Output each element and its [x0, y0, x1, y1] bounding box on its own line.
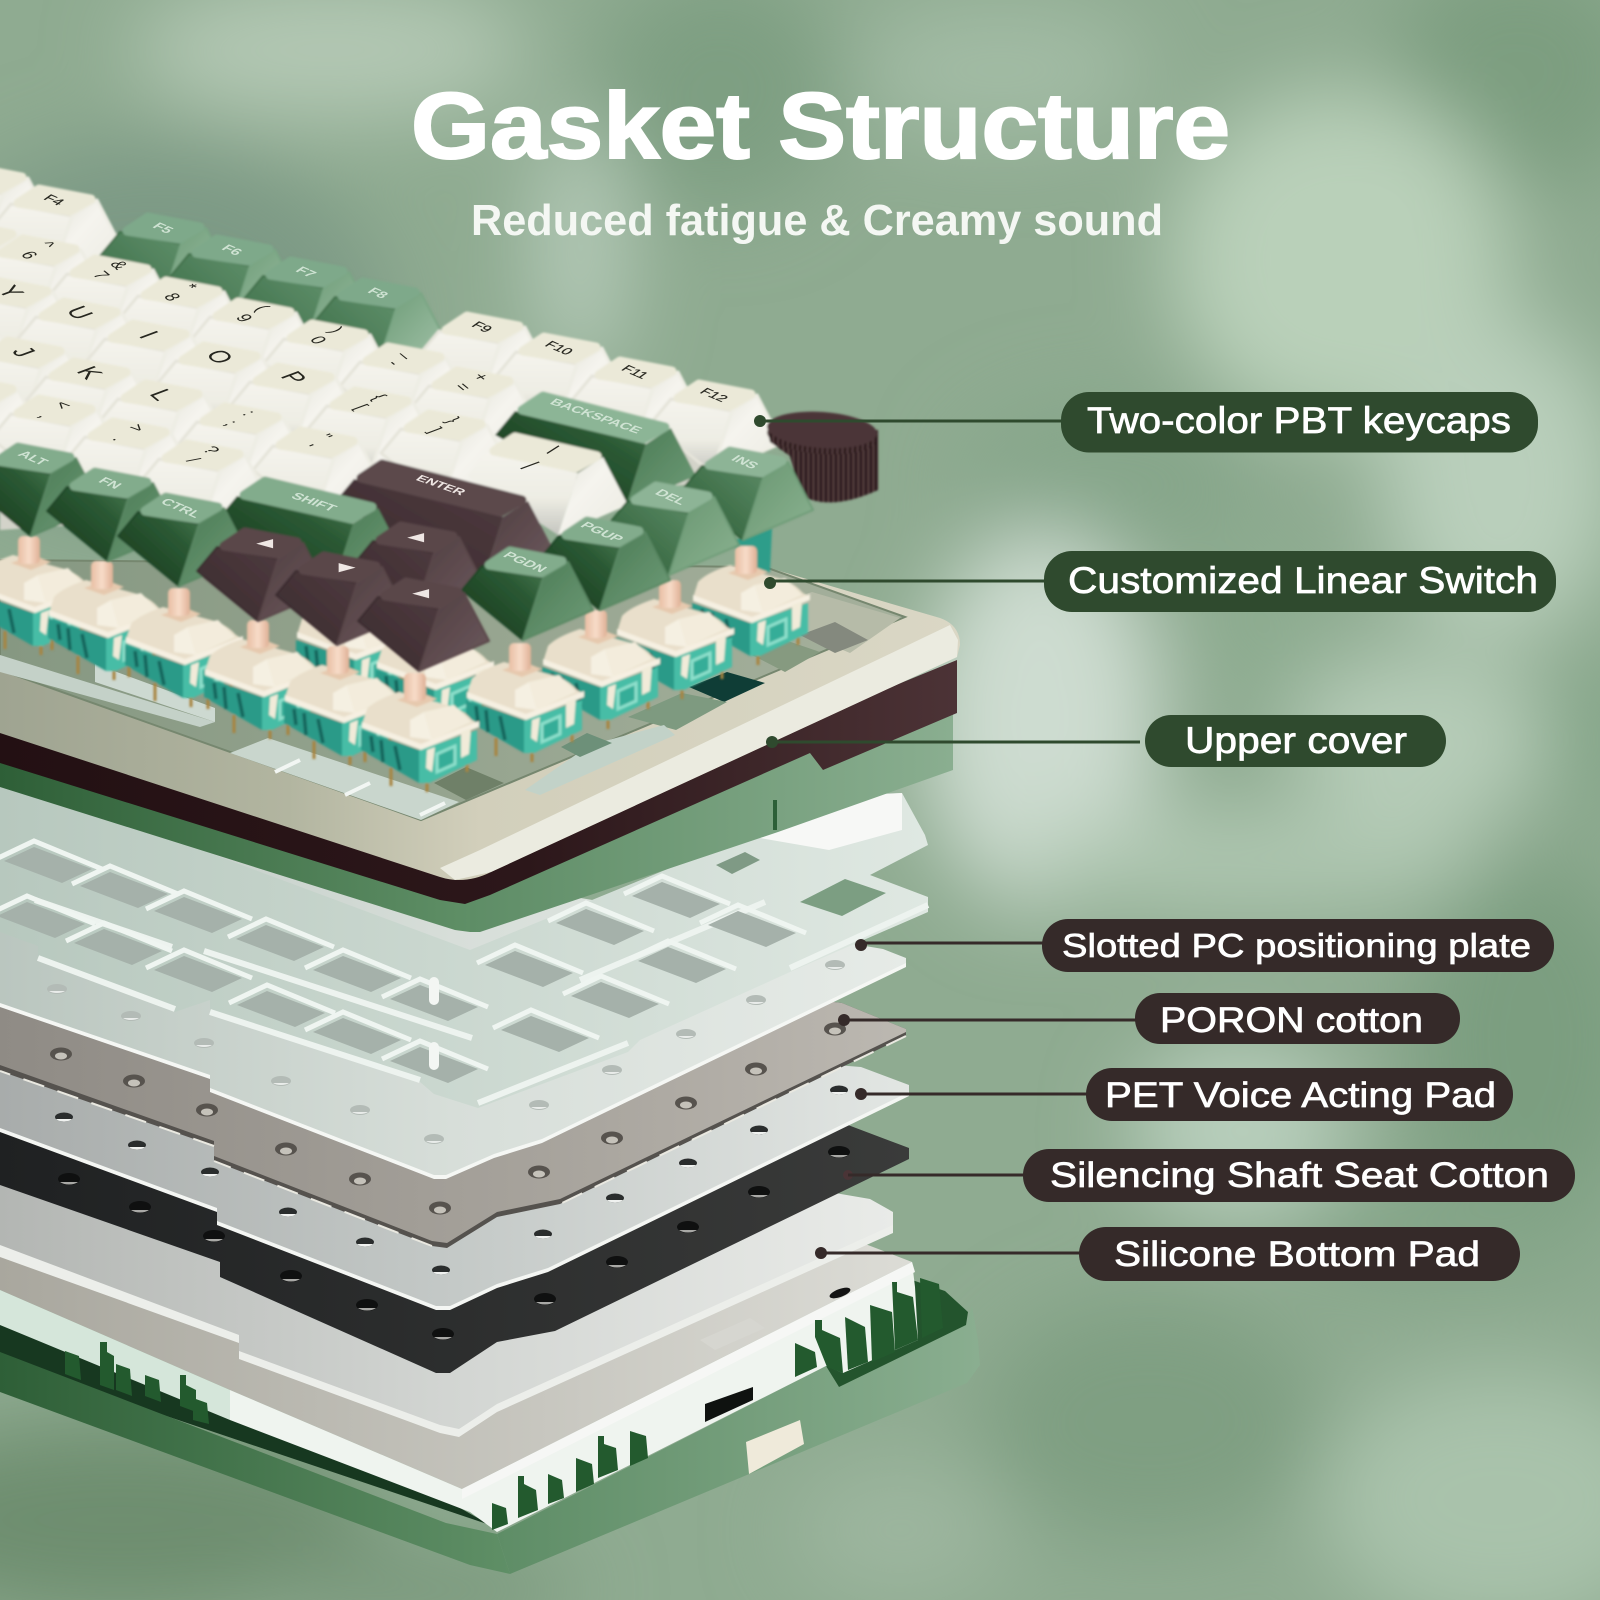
keycap legends: O	[199, 347, 239, 367]
keycap legends: 9	[231, 312, 257, 324]
keycap legends: P	[274, 368, 312, 388]
keycap legends: -	[382, 358, 406, 368]
keycap legends: "	[313, 432, 337, 442]
linear switches row	[0, 528, 810, 792]
callout: PORON cotton	[838, 993, 1460, 1044]
PCB slots and windows	[752, 640, 820, 672]
keycap legends: :	[238, 408, 260, 418]
keycap legends: F7	[292, 265, 320, 280]
keycap legends	[0, 193, 762, 599]
white block	[714, 793, 902, 850]
subtitle: Reduced fatigue & Creamy sound	[471, 196, 1163, 245]
backslash key	[467, 437, 628, 535]
port cut-out	[705, 1387, 753, 1422]
callout: Two-color PBT keycaps	[754, 392, 1538, 452]
keycap legends: |	[518, 459, 544, 471]
keycap legends: \	[539, 444, 566, 456]
PET voice acting pad	[0, 1000, 909, 1310]
callout: Upper cover	[766, 715, 1446, 767]
frosted white plate	[0, 800, 906, 1179]
shift key	[217, 481, 403, 586]
keycap legends: 0	[305, 334, 331, 346]
silencing shaft seat cotton: black plate	[0, 1050, 909, 1373]
right pocket	[795, 592, 900, 653]
keycap legends: F12	[697, 386, 731, 404]
keycap legends: ◀	[407, 531, 425, 543]
keycap legends: K	[70, 363, 108, 383]
keycap legends: (	[250, 303, 274, 313]
callout: Silicone Bottom Pad: Silicone Bottom Pad	[1114, 1235, 1480, 1274]
keycap legends: ◀	[412, 587, 430, 599]
keycap legends: )	[324, 325, 348, 335]
keycap legends: CTRL	[157, 496, 205, 520]
callout: Slotted PC positioning plate	[855, 919, 1554, 972]
callout: Upper cover: Upper cover	[1185, 720, 1407, 761]
keycap legends: F4	[40, 193, 68, 208]
keycap legends: _	[398, 346, 425, 360]
keycap legends: ?	[198, 444, 224, 456]
keycap legends: F9	[468, 320, 496, 334]
upper cover: keyboard frame	[0, 560, 960, 932]
callout: Slotted PC positioning plate: Slotted PC positioning plate	[1062, 927, 1531, 964]
keycap legends: >	[124, 422, 150, 434]
callout: PET Voice Acting Pad: PET Voice Acting Pad	[1105, 1076, 1496, 1115]
keycap legends: ;	[220, 418, 242, 428]
keycap legends: U	[59, 303, 99, 323]
callout: Silencing Shaft Seat Cotton: Silencing Shaft Seat Cotton	[1050, 1156, 1549, 1195]
keycap legends: +	[468, 371, 494, 383]
keycap legends: INS	[728, 453, 762, 471]
keycap legends: &	[105, 258, 133, 272]
keycap legends: ALT	[15, 449, 52, 468]
cream tab	[746, 1420, 804, 1474]
comb teeth	[65, 1278, 943, 1530]
keycap legends: BACKSPACE	[547, 397, 645, 435]
callout: PORON cotton: PORON cotton	[1160, 1001, 1423, 1040]
callout: PET Voice Acting Pad	[855, 1068, 1513, 1121]
knob	[766, 408, 878, 502]
keycap legends: PGDN	[500, 550, 550, 574]
keycap legends: }	[441, 415, 465, 425]
keycap legends: '	[296, 442, 318, 452]
keycap legends: L	[142, 386, 180, 404]
keycap legends: FN	[95, 475, 125, 491]
bottom case: green housing with teeth	[0, 1200, 980, 1574]
keycap legends: ENTER	[413, 473, 470, 497]
keycap legends: PGUP	[577, 520, 627, 544]
keycap legends: {	[367, 392, 391, 402]
keycap legends: DEL	[652, 487, 690, 507]
pegs	[429, 982, 439, 1065]
keycap legends: 6	[16, 249, 42, 261]
callout: Two-color PBT keycaps: Two-color PBT keycaps	[1087, 400, 1511, 441]
callout: Silicone Bottom Pad	[815, 1227, 1520, 1281]
keycap legends: F10	[542, 339, 577, 357]
keycap legends: SHIFT	[288, 491, 340, 514]
backspace key	[495, 396, 696, 506]
keycap legends: ◀	[256, 537, 274, 549]
keycap legends: ▶	[338, 561, 356, 573]
silicone bottom pad	[0, 1050, 893, 1437]
callout: Silencing Shaft Seat Cotton	[843, 1149, 1575, 1202]
keycap legends: =	[450, 381, 476, 393]
keycap legends: 7	[88, 269, 114, 281]
keycap legends: .	[108, 433, 130, 443]
keycap legends: F6	[218, 243, 246, 258]
callout: Customized Linear Switch: Customized Linear Switch	[1068, 560, 1538, 601]
keycap legends: I	[132, 328, 164, 342]
callout: Customized Linear Switch	[764, 551, 1556, 612]
keycap legends: ]	[424, 425, 446, 435]
keycap legends: F11	[618, 363, 652, 381]
PORON cotton: grey plate	[0, 900, 906, 1248]
keycap legends: 8	[159, 291, 185, 303]
keycap legends: *	[178, 282, 202, 293]
keycap legends: /	[182, 455, 205, 465]
keycap legends: [	[350, 402, 373, 412]
keycap legends: J	[5, 343, 41, 361]
keycap legends: F8	[364, 286, 392, 301]
enter key	[334, 464, 553, 579]
title: Gasket Structure	[411, 73, 1230, 178]
keycap legends: ,	[34, 410, 56, 420]
green window	[800, 879, 886, 916]
keycap legends: <	[50, 399, 76, 411]
keycaps	[0, 167, 878, 671]
keycap legends: ^	[34, 239, 60, 251]
keycap legends: F5	[149, 221, 177, 236]
slotted PC positioning plate	[0, 775, 928, 1108]
inner white tray	[0, 1200, 918, 1532]
